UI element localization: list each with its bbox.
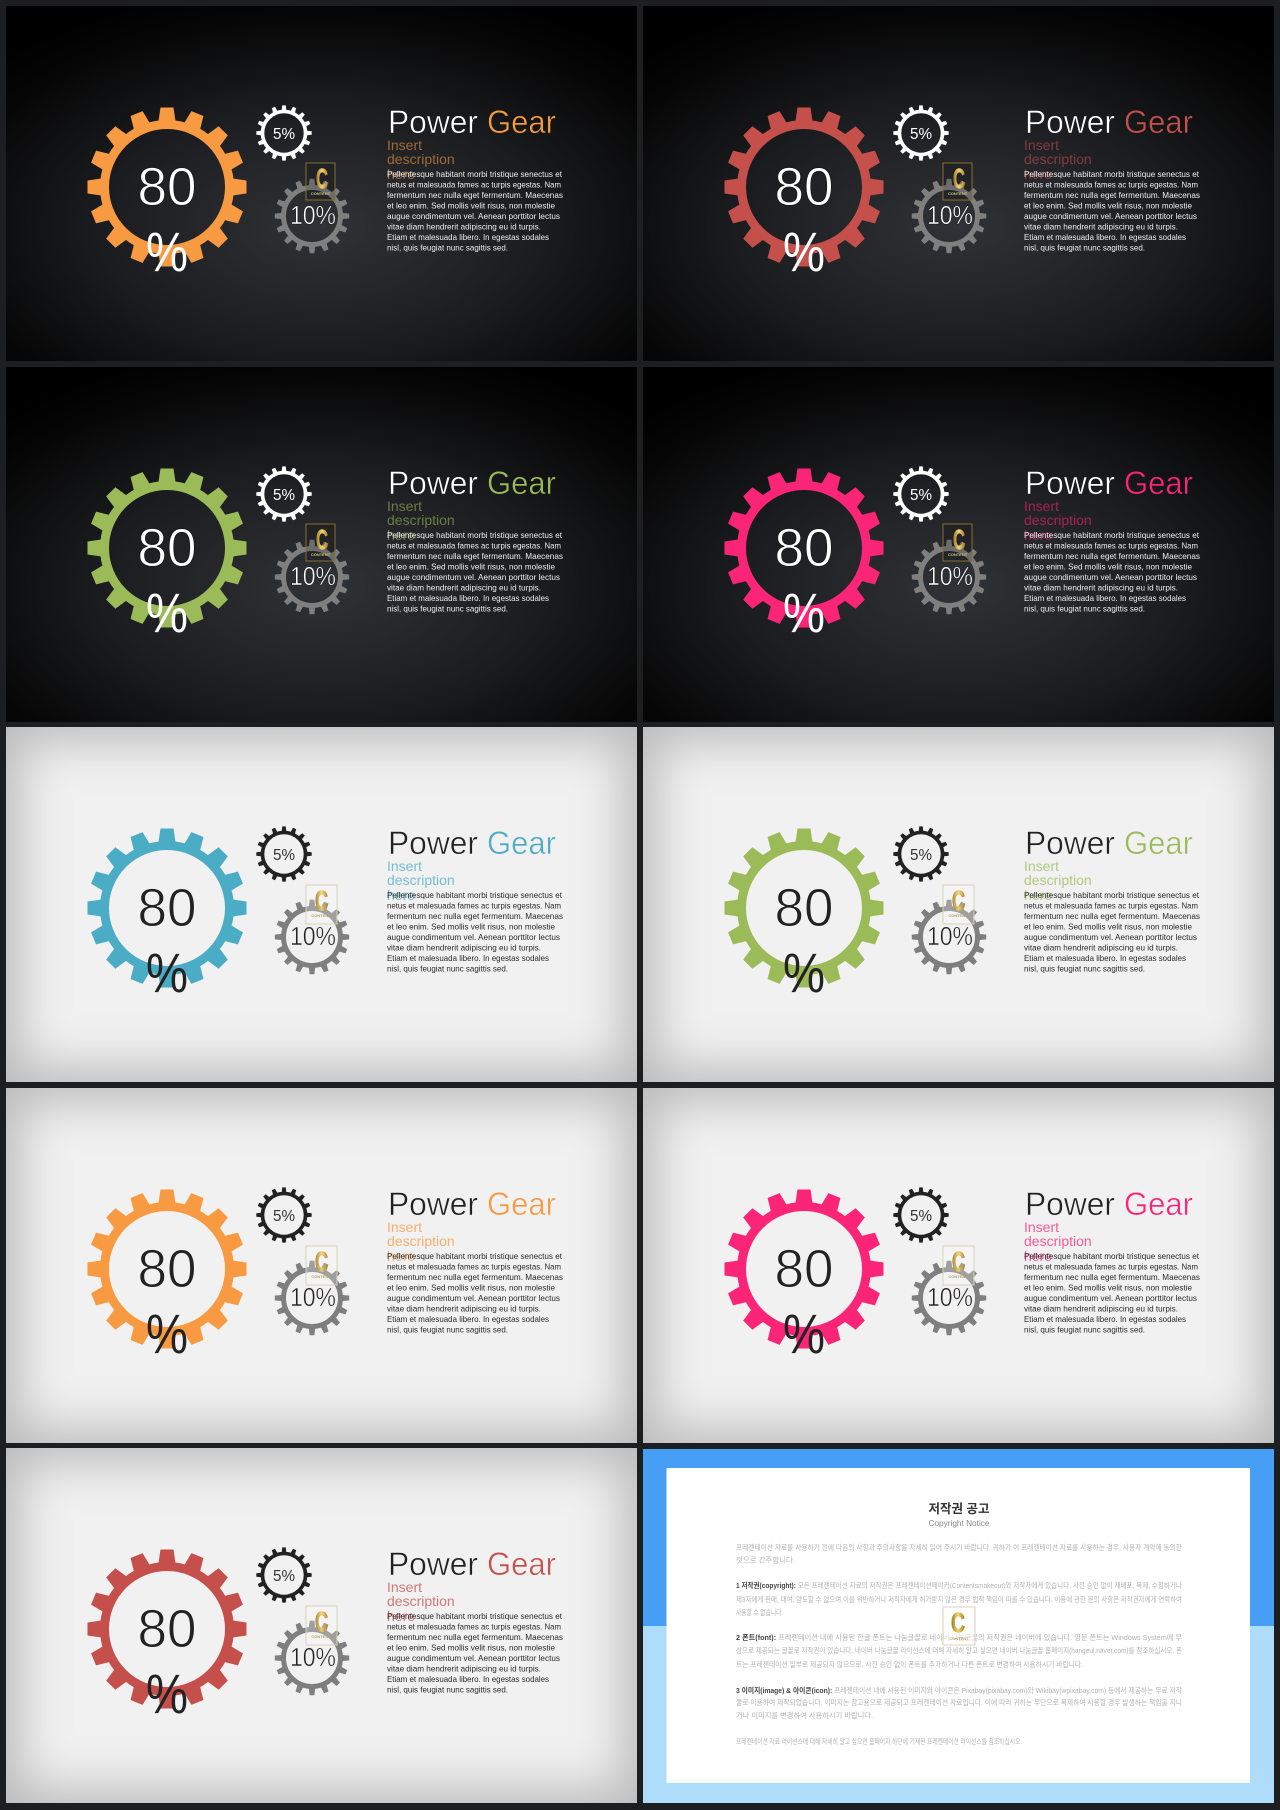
large green gear — [724, 828, 884, 988]
10 percent value: 10% — [290, 200, 336, 230]
80 percent value: % — [146, 1662, 188, 1725]
body text: nisl, quis feugiat nunc sagittis sed. — [387, 1324, 508, 1334]
watermark: CONTENT — [311, 191, 331, 196]
watermark — [306, 524, 335, 561]
body text: et leo enim. Sed mollis velit risus, non molestie — [1024, 922, 1192, 932]
body text: Etiam et malesuada libero. In egestas sodales — [387, 953, 549, 963]
medium grey gear — [275, 900, 349, 974]
medium grey gear — [275, 179, 349, 253]
body text: augue condimentum vel. Aenean porttitor lectus — [1024, 572, 1197, 582]
body text: vitae diam hendrerit adipiscing eu id turpis. — [387, 942, 541, 952]
image and icon paragraph: 3 이미지(image) & 아이콘(icon): 프레젠테이션 내에 사용된 이미지와 아이콘은 Pixabay(pixabay.com)와 Wikibay(wpixabay.com) 등에서 제공하는 무료 저작 — [736, 1686, 1204, 1695]
body text: Etiam et malesuada libero. In egestas sodales — [1024, 232, 1186, 242]
watermark: C — [315, 1246, 328, 1277]
10 percent value: 10% — [290, 1642, 336, 1672]
10 percent value: 10% — [290, 561, 336, 591]
body text: nisl, quis feugiat nunc sagittis sed. — [387, 1684, 508, 1694]
80 percent value: % — [146, 581, 188, 644]
small black gear — [893, 1187, 949, 1243]
small white gear — [893, 105, 949, 161]
body text: augue condimentum vel. Aenean porttitor lectus — [1024, 1293, 1197, 1303]
title: Power — [1025, 825, 1115, 861]
10 percent value: 10% — [927, 200, 973, 230]
body text: et leo enim. Sed mollis velit risus, non molestie — [387, 200, 555, 210]
80 percent value: % — [146, 941, 188, 1004]
body text: fermentum nec nulla eget fermentum. Maecenas — [1024, 551, 1200, 561]
large pink gear — [724, 468, 884, 628]
body text: nisl, quis feugiat nunc sagittis sed. — [1024, 604, 1145, 614]
title: Gear — [487, 104, 556, 140]
body text: vitae diam hendrerit adipiscing eu id turpis. — [387, 1304, 541, 1314]
subtitle: here — [1024, 166, 1052, 182]
body text: vitae diam hendrerit adipiscing eu id turpis. — [1024, 1304, 1178, 1314]
watermark: CONTENT — [948, 1274, 968, 1279]
80 percent value: 80 — [138, 157, 196, 217]
watermark — [943, 1607, 975, 1645]
image and icon paragraph: 거나 이미지를 변경하여 사용하시기 바랍니다. — [736, 1711, 873, 1720]
5 percent value: 5% — [910, 126, 932, 143]
body text: fermentum nec nulla eget fermentum. Maecenas — [387, 190, 563, 200]
body text: Etiam et malesuada libero. In egestas sodales — [387, 232, 549, 242]
body text: vitae diam hendrerit adipiscing eu id turpis. — [387, 582, 541, 592]
watermark: C — [315, 1606, 328, 1637]
body text: Pellentesque habitant morbi tristique senectus et — [387, 530, 563, 540]
font paragraph: 2 폰트(font): 프레젠테이션 내에 사용된 한글 폰트는 나눔글꼴로 네이버 나눔글꼴의 저작권은 네이버에 있습니다. 영문 폰트는 Windows System에 무 — [736, 1633, 1181, 1642]
body text: Pellentesque habitant morbi tristique senectus et — [387, 1611, 563, 1621]
body text: Etiam et malesuada libero. In egestas sodales — [1024, 953, 1186, 963]
subtitle: here — [387, 527, 415, 543]
5 percent value: 5% — [273, 487, 295, 504]
body text: nisl, quis feugiat nunc sagittis sed. — [1024, 964, 1145, 974]
subtitle: here — [387, 166, 415, 182]
copyright paragraph: 1 저작권(copyright): 모든 프레젠테이션 자료의 저작권은 프레젠테이션메이커(Contentsmakeout)와 저작자에게 있습니다. 사전 승인 없이 재배포, 복제, 수정하거나 — [736, 1581, 1220, 1590]
subtitle: description — [1024, 872, 1092, 888]
watermark: C — [952, 885, 965, 916]
body text: vitae diam hendrerit adipiscing eu id turpis. — [387, 1664, 541, 1674]
watermark — [943, 1246, 974, 1285]
large red gear — [88, 1550, 246, 1708]
body text: vitae diam hendrerit adipiscing eu id turpis. — [1024, 582, 1178, 592]
80 percent value: 80 — [774, 157, 834, 217]
5 percent value: 5% — [273, 1208, 295, 1225]
body text: fermentum nec nulla eget fermentum. Maecenas — [1024, 1272, 1200, 1282]
watermark: CONTENT — [948, 191, 968, 196]
5 percent value: 5% — [910, 847, 932, 864]
80 percent value: % — [783, 1302, 825, 1365]
large pink gear — [724, 1190, 884, 1348]
large orange gear — [88, 108, 246, 266]
subtitle: Insert — [387, 1219, 422, 1235]
body text: nisl, quis feugiat nunc sagittis sed. — [1024, 242, 1145, 252]
body text: et leo enim. Sed mollis velit risus, non molestie — [1024, 562, 1192, 572]
watermark: CONTENT — [311, 1274, 331, 1279]
notice subheading: Copyright Notice — [928, 1518, 990, 1528]
subtitle: description — [387, 151, 455, 167]
medium grey gear — [275, 1621, 349, 1695]
panel: copyright notice — [643, 1449, 1274, 1803]
title: Gear — [1124, 104, 1193, 140]
body text: Etiam et malesuada libero. In egestas sodales — [1024, 593, 1186, 603]
intro paragraph: 프레젠테이션 자료를 사용하기 전에 다음의 사항과 주의사항을 자세히 읽어 주시기 바랍니다. 귀하가 이 프레젠테이션 자료를 사용하는 경우, 사용자 계약에 동의한 — [736, 1543, 1182, 1552]
small black gear — [256, 1547, 312, 1603]
subtitle: description — [1024, 151, 1092, 167]
body text: netus et malesuada fames ac turpis egestas. Nam — [1024, 180, 1198, 190]
body text: vitae diam hendrerit adipiscing eu id turpis. — [1024, 222, 1178, 232]
body text: Pellentesque habitant morbi tristique senectus et — [387, 1251, 563, 1261]
body text: augue condimentum vel. Aenean porttitor lectus — [387, 572, 560, 582]
title: Power — [388, 1186, 478, 1222]
watermark: CONTENT — [948, 552, 968, 557]
watermark: CONTENT — [311, 1634, 331, 1639]
watermark: C — [953, 163, 965, 194]
body text: augue condimentum vel. Aenean porttitor lectus — [387, 932, 560, 942]
font paragraph: 상으로 제공되는 글꼴로 저작권이 있습니다. 네이버 나눔글꼴 라이선스에 대해 자세히 알고 싶으면 네이버 나눔글꼴 홈페이지(hangeul.naver.com)를 참조하십시오. 폰 — [736, 1646, 1182, 1655]
subtitle: here — [387, 1608, 415, 1624]
body text: fermentum nec nulla eget fermentum. Maecenas — [387, 551, 563, 561]
body text: augue condimentum vel. Aenean porttitor lectus — [387, 1293, 560, 1303]
panel: dark green gear slide — [6, 367, 637, 722]
body text: Pellentesque habitant morbi tristique senectus et — [387, 890, 563, 900]
title: Gear — [487, 1546, 556, 1582]
body text: augue condimentum vel. Aenean porttitor lectus — [1024, 932, 1197, 942]
body text: augue condimentum vel. Aenean porttitor lectus — [387, 1653, 560, 1663]
5 percent value: 5% — [910, 487, 932, 504]
watermark — [943, 163, 972, 200]
medium grey gear — [275, 540, 349, 614]
body text: Pellentesque habitant morbi tristique senectus et — [1024, 890, 1200, 900]
5 percent value: 5% — [273, 1568, 295, 1585]
title: Power — [388, 825, 478, 861]
80 percent value — [138, 518, 196, 644]
body text: Pellentesque habitant morbi tristique senectus et — [1024, 169, 1200, 179]
5 percent value: 5% — [273, 126, 295, 143]
subtitle: description — [387, 1593, 455, 1609]
body text: netus et malesuada fames ac turpis egestas. Nam — [387, 180, 561, 190]
body text: augue condimentum vel. Aenean porttitor lectus — [387, 211, 560, 221]
80 percent value — [138, 157, 196, 283]
80 percent value: 80 — [138, 1599, 196, 1659]
title: Power — [1025, 104, 1115, 140]
80 percent value: 80 — [138, 878, 196, 938]
80 percent value — [138, 1599, 196, 1725]
watermark: CONTENT — [311, 552, 331, 557]
copyright paragraph: 사용할 수 없습니다. — [736, 1608, 783, 1617]
subtitle: description — [1024, 1233, 1092, 1249]
body text: netus et malesuada fames ac turpis egestas. Nam — [387, 1622, 561, 1632]
body text: et leo enim. Sed mollis velit risus, non molestie — [387, 1282, 555, 1292]
title: Power — [388, 1546, 478, 1582]
body text: netus et malesuada fames ac turpis egestas. Nam — [1024, 900, 1198, 910]
80 percent value: % — [783, 941, 825, 1004]
80 percent value — [774, 157, 834, 283]
10 percent value: 10% — [290, 1282, 336, 1312]
medium grey gear — [912, 1261, 986, 1335]
large red gear — [724, 108, 884, 266]
panel: light orange gear slide — [6, 1088, 637, 1443]
notice sheet — [666, 1468, 1250, 1783]
subtitle: Insert — [387, 137, 422, 153]
5 percent value: 5% — [910, 1208, 932, 1225]
80 percent value — [138, 1239, 196, 1365]
80 percent value — [774, 518, 834, 644]
watermark: C — [316, 524, 328, 555]
80 percent value: % — [783, 581, 825, 644]
body text: fermentum nec nulla eget fermentum. Maecenas — [1024, 911, 1200, 921]
title: Gear — [1124, 825, 1193, 861]
body text: fermentum nec nulla eget fermentum. Maecenas — [387, 911, 563, 921]
subtitle: here — [387, 1248, 415, 1264]
image and icon paragraph: 물로 이용하여 제작되었습니다. 이미지는 참고용으로 제공되고 프레젠테이션 자료입니다. 이에 따라 귀하는 무단으로 복제하여 사용할 경우 발생하는 책임을 지니 — [736, 1698, 1182, 1707]
subtitle: Insert — [1024, 498, 1059, 514]
watermark: CONTENT — [949, 1636, 969, 1641]
watermark: CONTENT — [311, 913, 331, 918]
subtitle: Insert — [387, 858, 422, 874]
body text: fermentum nec nulla eget fermentum. Maecenas — [387, 1272, 563, 1282]
watermark: C — [316, 163, 328, 194]
subtitle: Insert — [1024, 858, 1059, 874]
10 percent value: 10% — [927, 561, 973, 591]
body text: et leo enim. Sed mollis velit risus, non molestie — [387, 562, 555, 572]
body text: Etiam et malesuada libero. In egestas sodales — [387, 593, 549, 603]
panel: dark pink gear slide — [643, 367, 1274, 722]
small white gear — [256, 466, 312, 522]
body text: vitae diam hendrerit adipiscing eu id turpis. — [387, 222, 541, 232]
80 percent value: % — [146, 220, 188, 283]
medium grey gear — [275, 1261, 349, 1335]
title: Power — [1025, 1186, 1115, 1222]
small black gear — [256, 1187, 312, 1243]
medium grey gear — [912, 540, 986, 614]
80 percent value: 80 — [138, 518, 196, 578]
watermark — [306, 1246, 337, 1285]
medium grey gear — [912, 179, 986, 253]
body text: netus et malesuada fames ac turpis egestas. Nam — [387, 1262, 561, 1272]
body text: et leo enim. Sed mollis velit risus, non molestie — [387, 922, 555, 932]
title: Power — [388, 465, 478, 501]
large green gear — [88, 468, 246, 628]
body text: et leo enim. Sed mollis velit risus, non molestie — [1024, 1282, 1192, 1292]
subtitle: Insert — [387, 498, 422, 514]
watermark — [306, 1606, 337, 1645]
small black gear — [893, 826, 949, 882]
80 percent value: 80 — [774, 518, 834, 578]
body text: Etiam et malesuada libero. In egestas sodales — [1024, 1314, 1186, 1324]
10 percent value: 10% — [290, 921, 336, 951]
80 percent value: 80 — [138, 1239, 196, 1299]
title: Gear — [487, 1186, 556, 1222]
subtitle: description — [387, 512, 455, 528]
subtitle: description — [387, 1233, 455, 1249]
80 percent value — [774, 1239, 834, 1365]
notice heading: 저작권 공고 — [929, 1501, 989, 1516]
watermark: C — [951, 1607, 965, 1638]
panel: light pink gear slide — [643, 1088, 1274, 1443]
5 percent value: 5% — [273, 847, 295, 864]
panel: light blue gear slide — [6, 727, 637, 1082]
watermark — [943, 885, 974, 924]
large blue gear — [88, 828, 246, 988]
panel: dark red gear slide — [643, 6, 1274, 361]
80 percent value: 80 — [774, 878, 834, 938]
watermark — [943, 524, 972, 561]
small black gear — [256, 826, 312, 882]
subtitle: here — [1024, 887, 1052, 903]
small white gear — [893, 466, 949, 522]
closing note: 프레젠테이션 자료 라이선스에 대해 자세히 알고 싶으면 홈페이지 하단에 기재된 프레젠테이션 라이선스를 참조하십시오. — [736, 1737, 1022, 1746]
watermark: C — [952, 1246, 965, 1277]
copyright paragraph: 제3자에게 판매, 대여, 양도할 수 없으며 이를 위반하거나 저작자에게 허가받지 않은 경우 법적 책임이 따를 수 있습니다. 이용에 관한 문의 사항은 저작권자에게 연락하여 — [736, 1595, 1182, 1604]
10 percent value: 10% — [927, 1282, 973, 1312]
subtitle: here — [1024, 1248, 1052, 1264]
watermark — [306, 163, 335, 200]
title: Gear — [1124, 465, 1193, 501]
intro paragraph: 것으로 간주합니다. — [736, 1556, 795, 1565]
10 percent value: 10% — [927, 921, 973, 951]
title: Power — [388, 104, 478, 140]
subtitle: Insert — [387, 1579, 422, 1595]
title: Power — [1025, 465, 1115, 501]
body text: vitae diam hendrerit adipiscing eu id turpis. — [1024, 942, 1178, 952]
body text: netus et malesuada fames ac turpis egestas. Nam — [1024, 1262, 1198, 1272]
title: Gear — [487, 465, 556, 501]
subtitle: description — [1024, 512, 1092, 528]
font paragraph: 트는 프레젠테이션 일부로 제공되지 않으므로, 사전 승인 없이 폰트를 추가하거나 다른 폰트로 변경하여 사용하시기 바랍니다. — [736, 1660, 1083, 1669]
subtitle: here — [1024, 527, 1052, 543]
body text: nisl, quis feugiat nunc sagittis sed. — [387, 604, 508, 614]
title: Gear — [1124, 1186, 1193, 1222]
panel: light red gear slide — [6, 1448, 637, 1803]
80 percent value — [138, 878, 196, 1004]
watermark: CONTENT — [948, 913, 968, 918]
body text: Pellentesque habitant morbi tristique senectus et — [387, 169, 563, 179]
panel: dark orange gear slide — [6, 6, 637, 361]
watermark: C — [953, 524, 965, 555]
title: Gear — [487, 825, 556, 861]
body text: fermentum nec nulla eget fermentum. Maecenas — [1024, 190, 1200, 200]
subtitle: description — [387, 872, 455, 888]
80 percent value: % — [146, 1302, 188, 1365]
body text: netus et malesuada fames ac turpis egestas. Nam — [387, 900, 561, 910]
80 percent value — [774, 878, 834, 1004]
large orange gear — [88, 1190, 246, 1348]
80 percent value: 80 — [774, 1239, 834, 1299]
body text: nisl, quis feugiat nunc sagittis sed. — [387, 242, 508, 252]
body text: fermentum nec nulla eget fermentum. Maecenas — [387, 1632, 563, 1642]
subtitle: Insert — [1024, 137, 1059, 153]
body text: Pellentesque habitant morbi tristique senectus et — [1024, 530, 1200, 540]
body text: nisl, quis feugiat nunc sagittis sed. — [387, 964, 508, 974]
body text: nisl, quis feugiat nunc sagittis sed. — [1024, 1324, 1145, 1334]
body text: augue condimentum vel. Aenean porttitor lectus — [1024, 211, 1197, 221]
body text: Pellentesque habitant morbi tristique senectus et — [1024, 1251, 1200, 1261]
subtitle: here — [387, 887, 415, 903]
small white gear — [256, 105, 312, 161]
watermark — [306, 885, 337, 924]
medium grey gear — [912, 900, 986, 974]
body text: Etiam et malesuada libero. In egestas sodales — [387, 1314, 549, 1324]
subtitle: Insert — [1024, 1219, 1059, 1235]
watermark: C — [315, 885, 328, 916]
body text: netus et malesuada fames ac turpis egestas. Nam — [387, 540, 561, 550]
80 percent value: % — [783, 220, 825, 283]
body text: netus et malesuada fames ac turpis egestas. Nam — [1024, 540, 1198, 550]
body text: et leo enim. Sed mollis velit risus, non molestie — [1024, 200, 1192, 210]
body text: et leo enim. Sed mollis velit risus, non molestie — [387, 1642, 555, 1652]
panel: light green gear slide — [643, 727, 1274, 1082]
body text: Etiam et malesuada libero. In egestas sodales — [387, 1674, 549, 1684]
